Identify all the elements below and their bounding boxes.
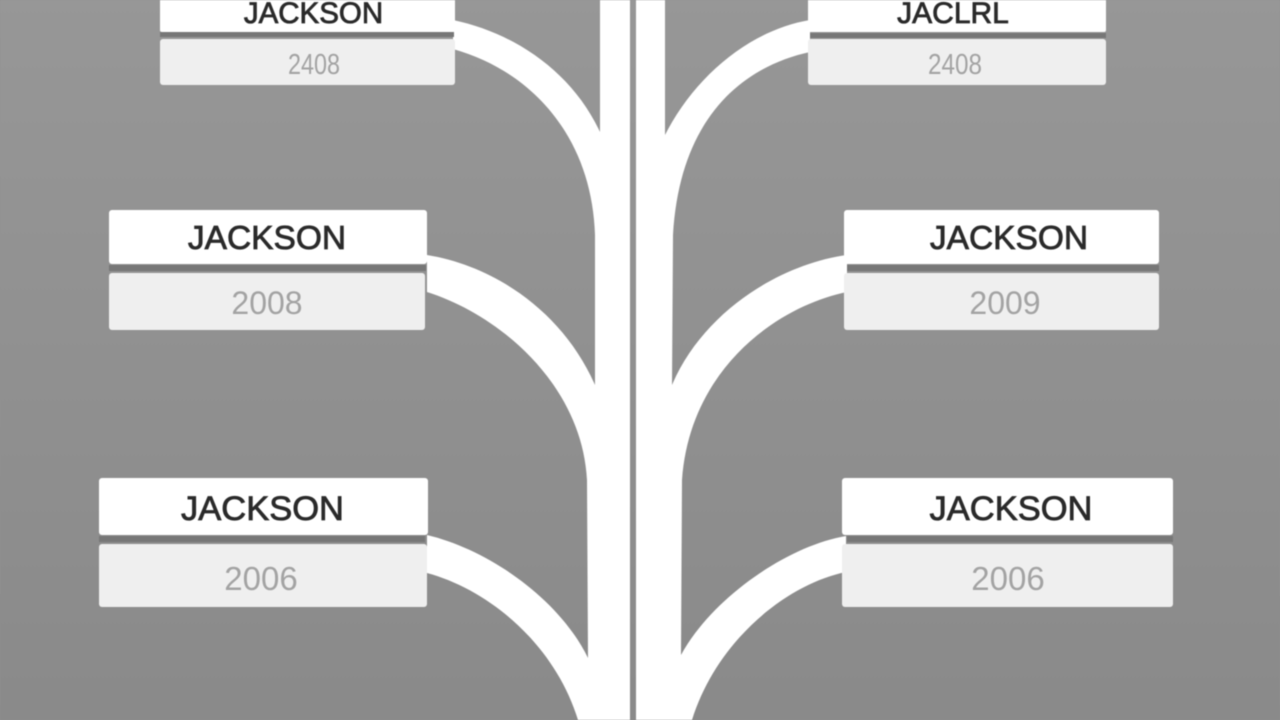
left tree trunk and branches [427,0,630,720]
year: middle right: 2009 [969,285,1041,321]
name: bottom right: JACKSON [930,490,1092,528]
year: bottom right: 2006 [971,560,1045,597]
year: bottom left: 2006 [224,560,298,597]
name: middle left: JACKSON [188,220,346,257]
year: top left: 2408 [288,49,340,81]
card: top right [808,0,1106,85]
card: bottom right [842,478,1173,607]
name: middle right: JACKSON [930,220,1088,257]
card: middle right [844,210,1159,330]
right tree trunk and branches [636,0,847,720]
card: middle left [109,210,427,330]
year: top right: 2408 [928,49,982,81]
card: bottom left [99,478,428,607]
card: top left [160,0,455,85]
year: middle left: 2008 [231,285,303,321]
name: bottom left: JACKSON [181,490,344,528]
